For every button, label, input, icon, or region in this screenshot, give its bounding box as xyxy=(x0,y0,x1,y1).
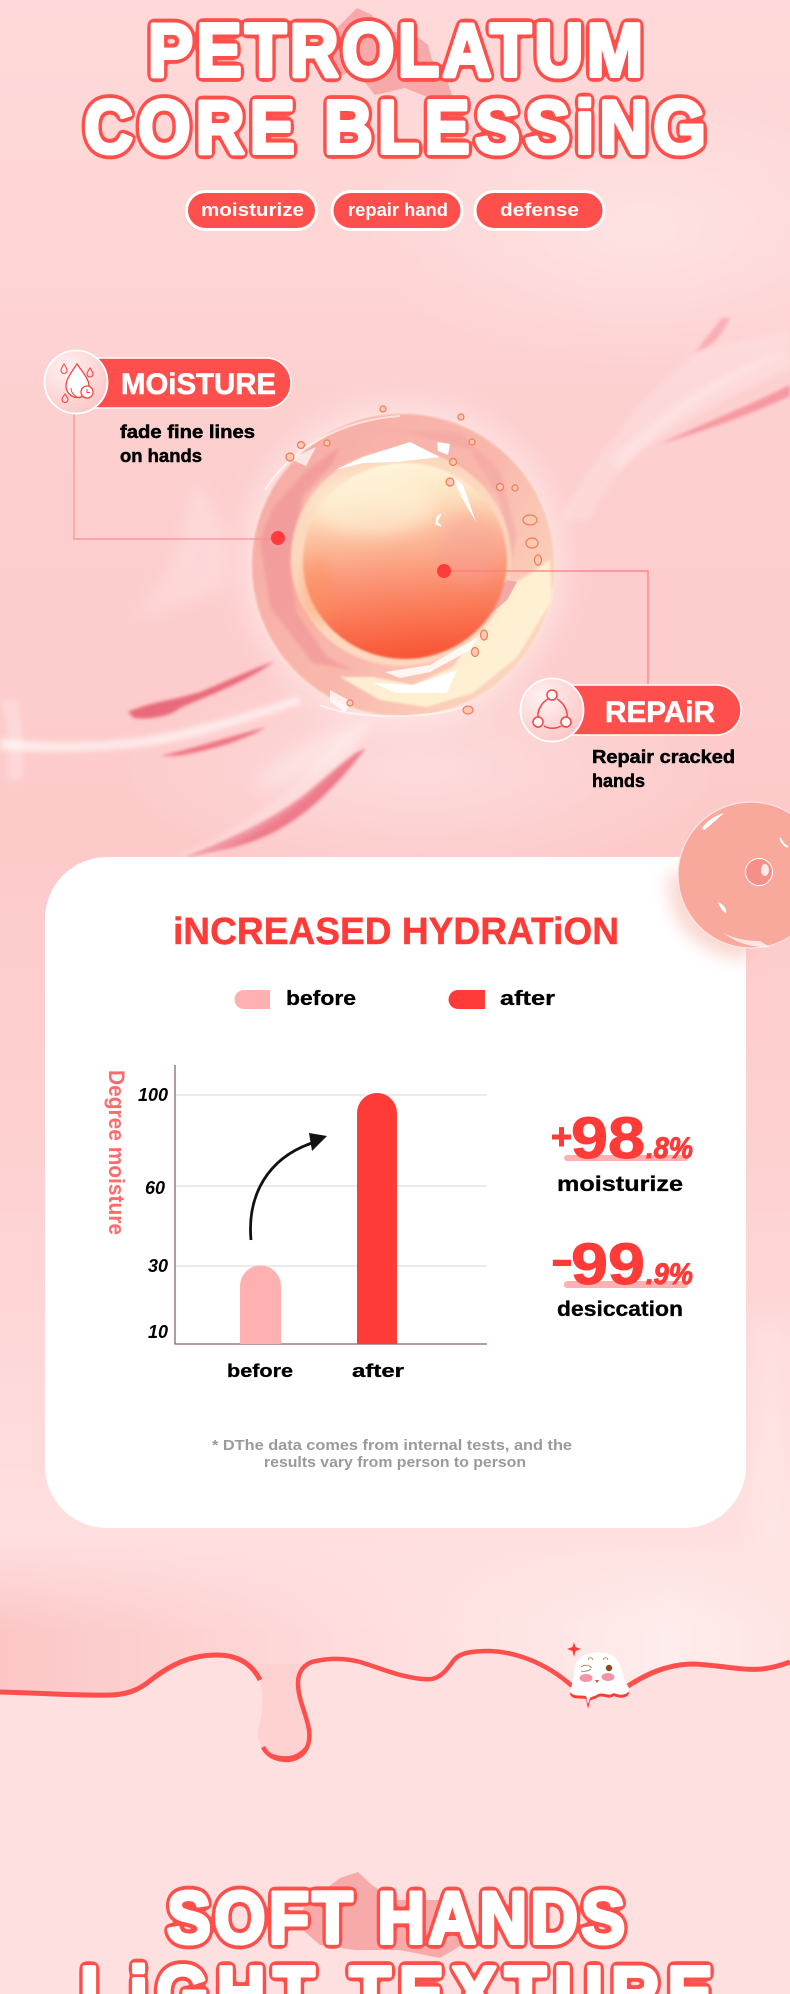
bar: after xyxy=(357,1093,397,1344)
y axis labels: 30 xyxy=(148,1256,168,1276)
cream lower-right ring xyxy=(340,560,552,707)
bar chart xyxy=(104,1065,487,1381)
title line 1: PETROLATUM xyxy=(148,9,643,93)
y axis labels: 100 xyxy=(138,1085,168,1105)
gel sphere xyxy=(241,403,565,727)
leader dot: moisture xyxy=(271,531,285,545)
label text: REPAiR xyxy=(605,696,715,729)
heading: iNCREASED HYDRATiON xyxy=(173,911,619,953)
inner cream wall xyxy=(291,450,511,666)
upper gradient area xyxy=(0,1564,744,1692)
stat: moisturize: + xyxy=(551,1116,572,1157)
description: on hands xyxy=(120,446,202,466)
stat: desiccation: .9% xyxy=(646,1258,693,1291)
stat: moisturize: .8% xyxy=(646,1132,693,1165)
title: soft hands light texture xyxy=(167,1872,625,1959)
panel: increased hydration xyxy=(45,857,746,1528)
background silk streaks xyxy=(0,318,790,860)
footnote: results vary from person to person xyxy=(264,1454,526,1471)
y axis title: Degree moisture xyxy=(104,1070,129,1235)
label text: MOiSTURE xyxy=(121,368,276,401)
leader dot: repair xyxy=(437,564,451,578)
pill: defense: defense xyxy=(500,200,579,220)
wave outline xyxy=(0,1655,260,1695)
pill: moisturize xyxy=(186,192,316,230)
stat: moisturize: moisturize xyxy=(557,1173,683,1196)
description: fade fine lines xyxy=(120,422,255,442)
icon: ghost mascot xyxy=(567,1642,629,1709)
icon: repair cycle xyxy=(520,678,584,742)
wavy syrup band with drip xyxy=(0,1564,790,1762)
decorative gel drop at card corner xyxy=(668,802,790,960)
title: petrolatum core blessing xyxy=(148,8,643,98)
legend xyxy=(234,988,555,1010)
legend: before xyxy=(286,988,356,1010)
icon: water drop with clock xyxy=(44,350,108,414)
white gel highlights xyxy=(335,442,440,470)
brush blot behind title xyxy=(322,8,452,98)
pill: repair hand: repair hand xyxy=(348,200,448,220)
title line 2: CORE BLESSiNG xyxy=(84,86,706,170)
stat: desiccation: desiccation xyxy=(557,1298,683,1321)
leader line: moisture xyxy=(74,414,272,539)
description: Repair cracked xyxy=(592,747,735,767)
bar chart: after xyxy=(352,1361,404,1381)
stat: desiccation: 99 xyxy=(571,1232,645,1297)
x labels: before xyxy=(227,1361,293,1381)
callout: repair xyxy=(520,678,741,791)
y axis labels: 10 xyxy=(148,1322,168,1342)
left darker band xyxy=(260,447,353,670)
outer rim xyxy=(251,413,555,717)
yolk xyxy=(303,463,507,659)
stat: moisturize xyxy=(551,1106,693,1196)
pill: defense xyxy=(475,192,604,230)
card xyxy=(45,857,746,1528)
brush blot behind title xyxy=(297,1872,462,1958)
footnote: * DThe data comes from internal tests, and the xyxy=(212,1437,572,1454)
stat: desiccation xyxy=(551,1232,693,1321)
title line 1: SOFT HANDS xyxy=(167,1877,625,1959)
legend: after xyxy=(500,988,555,1010)
y axis labels xyxy=(138,1085,168,1342)
pill: moisturize: moisturize xyxy=(201,200,304,220)
arrow xyxy=(251,1133,327,1240)
bar: before xyxy=(240,1266,281,1344)
drip body xyxy=(258,1664,309,1760)
leader line: repair xyxy=(450,571,648,684)
stat: desiccation: - xyxy=(551,1235,573,1284)
description: hands xyxy=(592,771,645,791)
label bar xyxy=(552,685,741,735)
pill: repair hand xyxy=(332,192,462,230)
stat: moisturize: 98 xyxy=(571,1106,645,1171)
label bar xyxy=(76,358,291,408)
y axis labels: 60 xyxy=(145,1178,165,1198)
droplets on the sphere xyxy=(286,406,542,714)
callout: moisture xyxy=(44,350,291,466)
